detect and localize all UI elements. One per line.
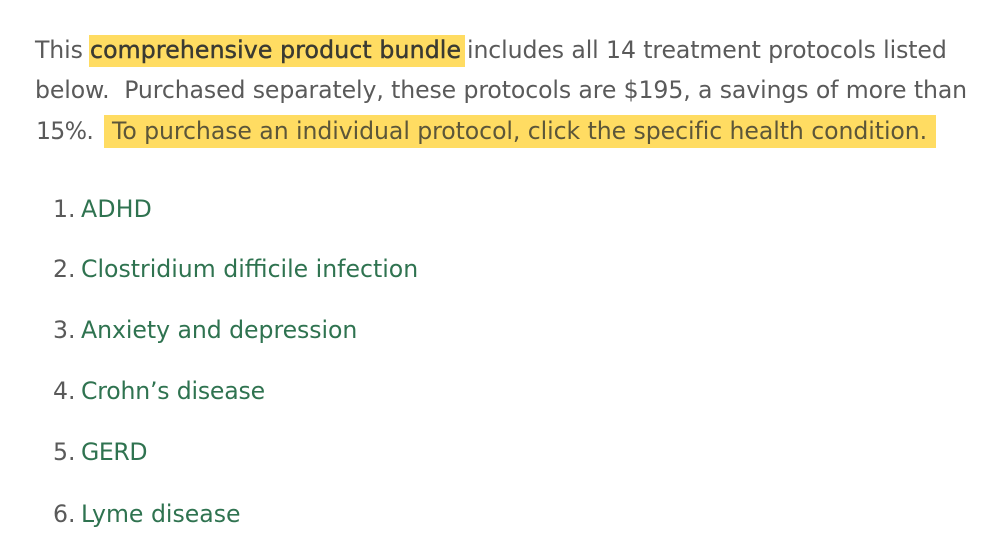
item 4: 4.	[53, 377, 76, 405]
item 5: 5.	[53, 438, 76, 466]
item 3: Anxiety and depression	[81, 316, 357, 344]
text: 15%: 15%.	[36, 117, 93, 145]
text: comprehensive product bundle: comprehensive product bundle	[90, 36, 461, 64]
text: purchase instruction: To purchase an individual protocol, click the specific health condition.	[112, 117, 927, 145]
numbered list of conditions	[53, 195, 418, 528]
highlight: product bundle	[89, 35, 465, 67]
highlight: purchase instruction	[104, 115, 936, 148]
item 3: 3.	[53, 316, 76, 344]
intro paragraph	[34, 35, 967, 148]
item 1: 1.	[53, 195, 76, 223]
item 2: Clostridium difficile infection	[81, 255, 418, 283]
item 6: 6.	[53, 500, 76, 528]
text: This: This	[35, 36, 83, 64]
item 2: 2.	[53, 255, 76, 283]
item 4: Crohn’s disease	[81, 377, 265, 405]
text: rest of line one: includes all 14 treatment protocols listed	[467, 36, 947, 64]
text: line two: below. Purchased separately, these protocols are $195, a savings of more than	[35, 76, 967, 104]
item 1: ADHD	[81, 195, 152, 223]
item 5: GERD	[81, 438, 147, 466]
item 6: Lyme disease	[81, 500, 241, 528]
